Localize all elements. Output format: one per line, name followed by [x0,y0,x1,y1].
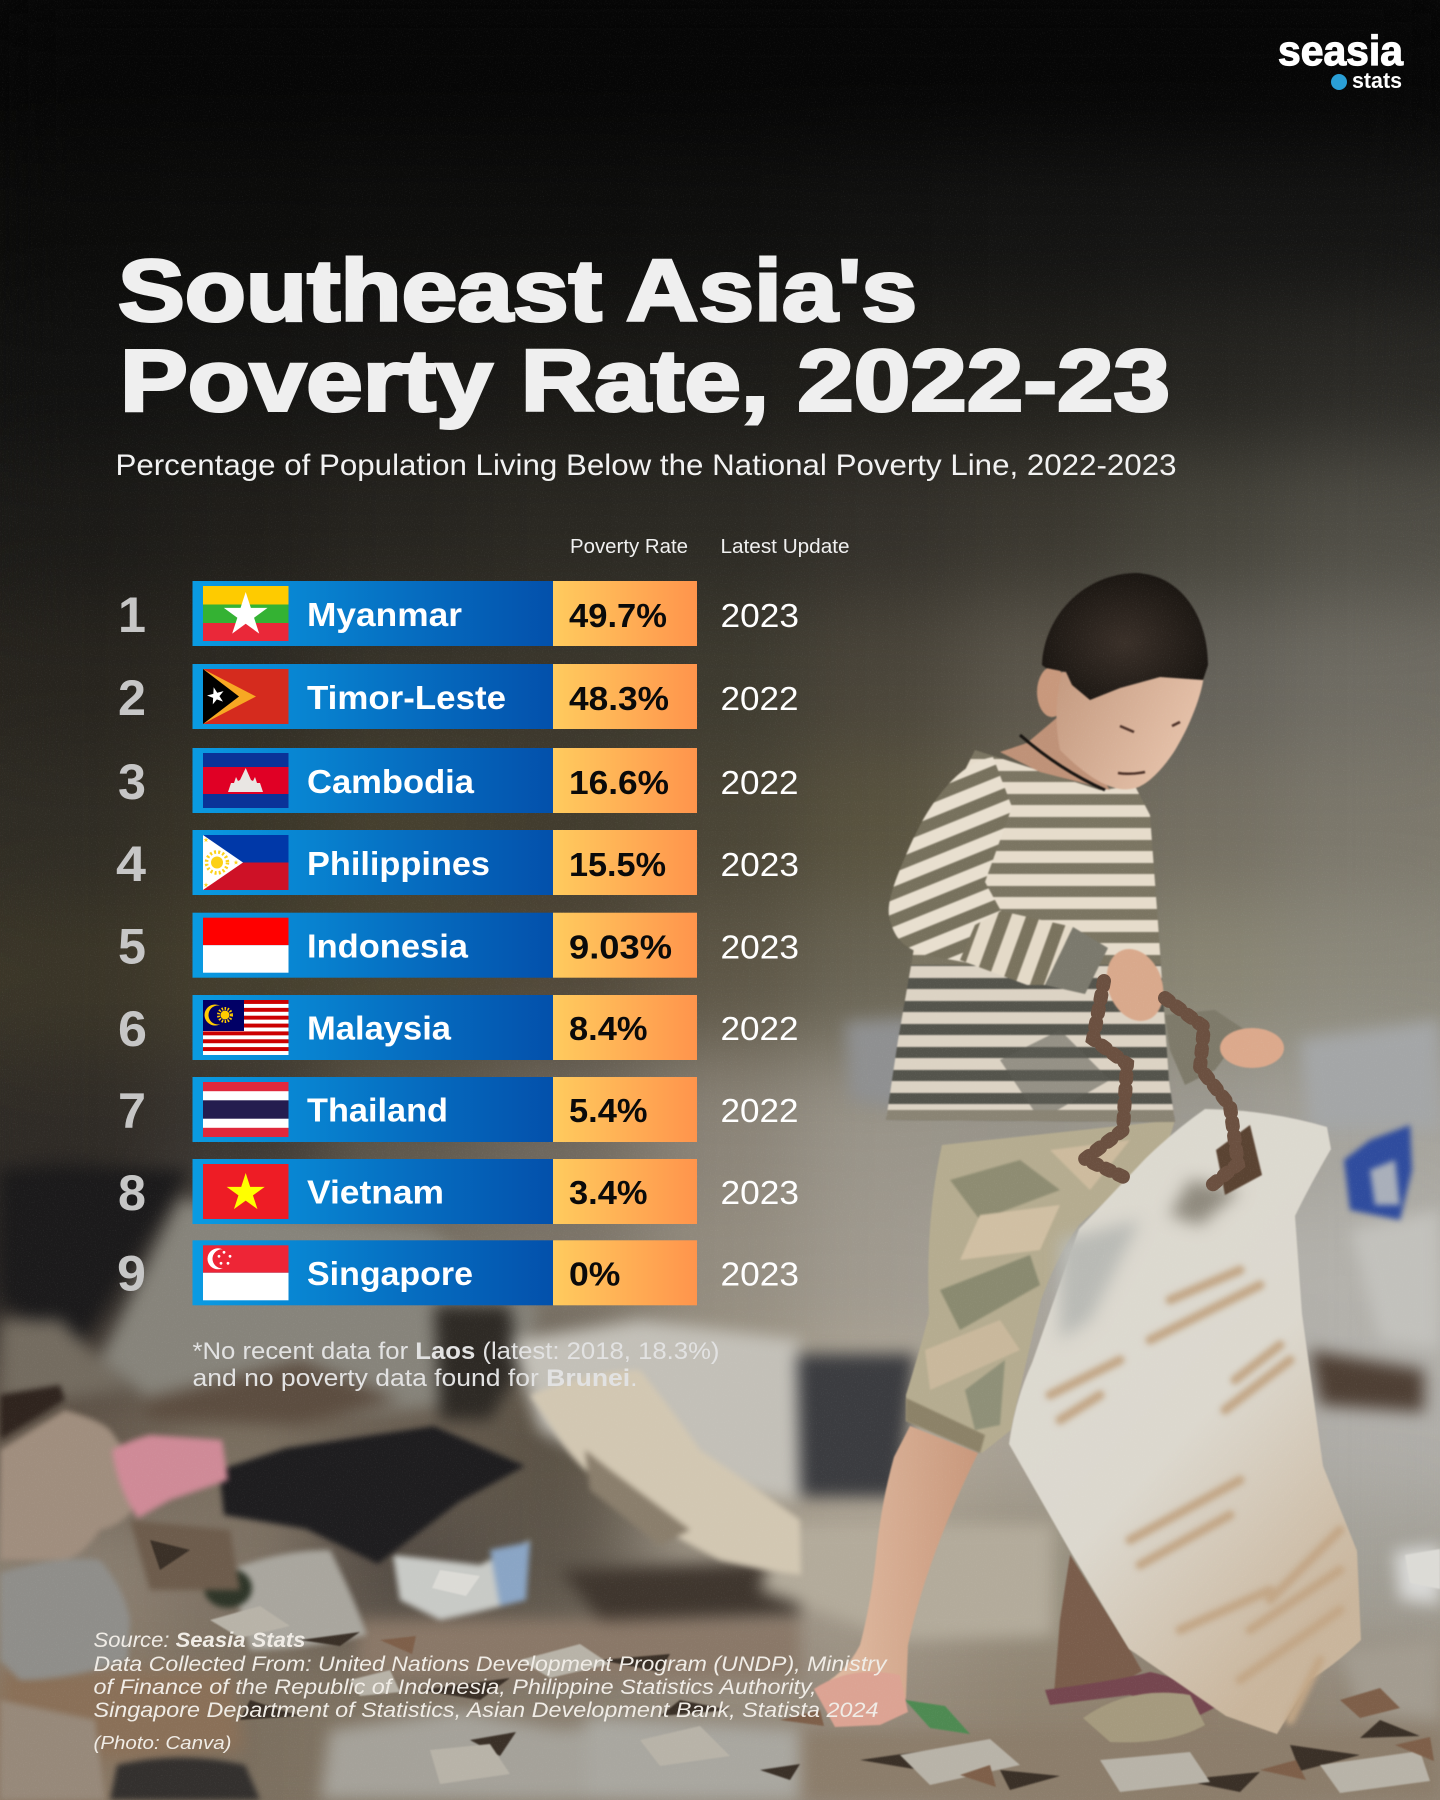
flag: Cambodia [203,753,288,808]
logo: seasia stats: seasia [1278,27,1404,74]
far hand [1220,1028,1284,1068]
flag: Philippines [203,835,288,890]
row 2: Timor-Leste [118,664,798,729]
row 4: Philippines: 2023 [720,846,799,883]
row 9: Singapore: 0% [569,1255,620,1292]
flag: Myanmar [203,586,288,641]
photo backdrop: distant blurred rubbish [0,1018,1440,1800]
sack dirt streaks [1050,1270,1340,1720]
row 6: Malaysia: 8.4% [569,1010,648,1047]
row 3: Cambodia [118,748,798,813]
black plastic bag [219,1426,525,1564]
row 9: Singapore [117,1240,799,1305]
row 1: Myanmar: 49.7% [569,597,667,634]
row 4: Philippines: 15.5% [569,846,666,883]
flag: Vietnam [203,1164,288,1219]
title: Poverty Rate, 2022-23 [120,332,1170,430]
row 1: Myanmar: 2023 [720,597,799,634]
sack [1009,1109,1361,1734]
logo: seasia stats: stats [1352,68,1402,93]
forearm stripes [960,911,1073,985]
title [118,242,1170,430]
row 4: Philippines: 4 [116,836,146,892]
row 8: Vietnam [118,1159,799,1224]
flag: Singapore [203,1245,288,1300]
title: Southeast Asia's [118,242,917,340]
row 2: Timor-Leste: 2022 [720,680,798,717]
column headers: Poverty Rate [570,536,688,558]
row 2: Timor-Leste: 48.3% [569,680,669,717]
flag: Timor-Leste [203,669,288,724]
neck [1000,715,1110,790]
child figure [814,573,1284,1742]
footnote [192,1338,720,1392]
near leg and foot [814,1426,978,1725]
row 3: Cambodia: Cambodia [307,763,475,800]
row 6: Malaysia: 6 [118,1001,147,1057]
source credits: of Finance of the Republic of Indonesia, Philippine Statistics Authority, [94,1676,816,1699]
camouflage shorts [906,1120,1175,1453]
striped shirt torso [880,745,1180,1125]
row 2: Timor-Leste: 2 [118,670,146,726]
facial features [1118,722,1180,774]
source credits: (Photo: Canva) [94,1733,232,1753]
row 7: Thailand: 7 [118,1083,146,1139]
row 1: Myanmar: Myanmar [307,596,462,633]
row 8: Vietnam: 3.4% [569,1174,648,1211]
tan sandal [1083,1693,1205,1742]
right sleeve [1165,1010,1245,1085]
pink sandal [814,1672,908,1727]
holding hand [1097,941,1173,1029]
row 7: Thailand: Thailand [307,1092,448,1128]
column headers [570,536,850,558]
row 8: Vietnam: 8 [118,1165,146,1221]
row 1: Myanmar: 1 [118,587,146,643]
flag: Malaysia [203,1000,288,1055]
hair [1042,573,1208,700]
row 4: Philippines [116,830,799,895]
row 2: Timor-Leste: Timor-Leste [307,679,506,716]
source credits: Source: Seasia Stats [94,1629,306,1652]
flag: Indonesia [203,918,288,973]
far leg [1054,1555,1142,1695]
upper arm stripes [889,757,1012,965]
sack grey folds [1060,1180,1240,1340]
row 8: Vietnam: Vietnam [307,1174,444,1210]
source credits: Singapore Department of Statistics, Asian Development Bank, Statista 2024 [94,1699,878,1722]
row 7: Thailand: 2022 [720,1092,798,1129]
row 9: Singapore: Singapore [307,1255,473,1292]
logo mark: blue circle [1331,74,1347,90]
row 9: Singapore: 2023 [720,1255,799,1292]
row 7: Thailand [118,1077,798,1142]
row 5: Indonesia: 9.03% [569,929,672,966]
row 4: Philippines: Philippines [307,845,490,882]
row 3: Cambodia: 2022 [720,764,798,801]
ear [1037,667,1067,717]
rusty chain [1085,981,1238,1185]
row 8: Vietnam: 2023 [720,1174,799,1211]
column headers: Latest Update [720,536,850,558]
face [1056,672,1204,789]
scattered litter flecks [150,1540,1440,1793]
row 3: Cambodia: 3 [118,754,146,810]
maroon sandal strap [1045,1672,1220,1715]
row 9: Singapore: 9 [117,1245,146,1301]
source credits: Data Collected From: United Nations Development Program (UNDP), Ministry [94,1653,888,1676]
ranking table [116,581,799,1305]
row 5: Indonesia: 2023 [720,929,799,966]
necklace [1020,735,1105,790]
footnote: *No recent data for Laos (latest: 2018, 18.3%) [192,1338,720,1365]
source credits [94,1629,888,1753]
pink plastic wrapper [112,1435,228,1518]
row 6: Malaysia [118,995,798,1060]
footnote: and no poverty data found for Brunei . [192,1365,638,1392]
row 1: Myanmar [118,581,799,646]
flag: Thailand [203,1082,288,1137]
row 6: Malaysia: Malaysia [307,1010,452,1046]
row 5: Indonesia [118,913,799,978]
row 7: Thailand: 5.4% [569,1092,648,1129]
row 3: Cambodia: 16.6% [569,764,669,801]
subtitle: Percentage of Population Living Below the National Poverty Line, 2022-2023 [116,449,1176,482]
row 5: Indonesia: Indonesia [307,928,469,965]
sleeve cuff [1045,927,1108,994]
row 6: Malaysia: 2022 [720,1010,798,1047]
photo backdrop: mid-ground rubbish pile [0,1125,1412,1800]
row 5: Indonesia: 5 [118,919,146,975]
